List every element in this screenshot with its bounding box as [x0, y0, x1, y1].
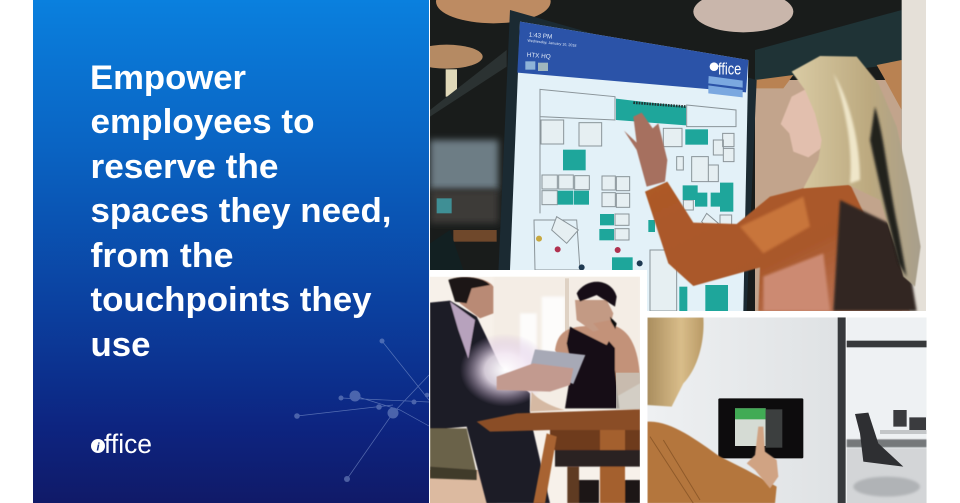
screen: [508, 22, 748, 311]
screen: HTX HQ: [526, 52, 551, 61]
iOffice logo: ffice: [104, 429, 152, 459]
woman: [624, 56, 921, 311]
screen header: [517, 22, 748, 92]
title: touchpoints they: [90, 281, 372, 319]
title: reserve the: [90, 148, 278, 186]
floor plan: [534, 89, 736, 311]
iOffice logo: i: [96, 442, 100, 454]
tablet: [497, 349, 585, 392]
man: [430, 277, 550, 503]
jacket and arm: [645, 182, 910, 311]
wall panel device: [718, 398, 803, 458]
photo: colleagues with tablet: [430, 277, 640, 503]
table: [477, 409, 640, 503]
screen: 1:43 PM: [528, 32, 553, 41]
lens flare: [462, 336, 536, 406]
white frame behind lower-right photo: [647, 311, 960, 503]
ceiling and office background: [411, 0, 927, 311]
title: use: [90, 326, 150, 364]
title: spaces they need,: [90, 192, 392, 230]
screen: ffice: [718, 60, 741, 79]
hair: [792, 56, 921, 287]
screen bezel: [497, 10, 757, 311]
photo: wall-mounted room panel: [647, 317, 927, 503]
woman: [530, 282, 640, 412]
title: from the: [90, 237, 234, 275]
title: [90, 59, 392, 364]
screen: Wednesday, January 10, 2018: [527, 39, 577, 48]
network decoration: [294, 338, 429, 482]
glass meeting room: [838, 317, 927, 503]
hand: [624, 113, 667, 187]
photo: woman at touchscreen: [411, 0, 927, 311]
window background: [430, 278, 569, 503]
title: Empower: [90, 59, 246, 97]
glass: [616, 373, 640, 409]
face: [780, 90, 822, 158]
woman: [647, 317, 778, 503]
title: employees to: [90, 103, 314, 141]
white frame behind lower-left photo: [429, 270, 647, 503]
blue panel: [33, 0, 429, 503]
